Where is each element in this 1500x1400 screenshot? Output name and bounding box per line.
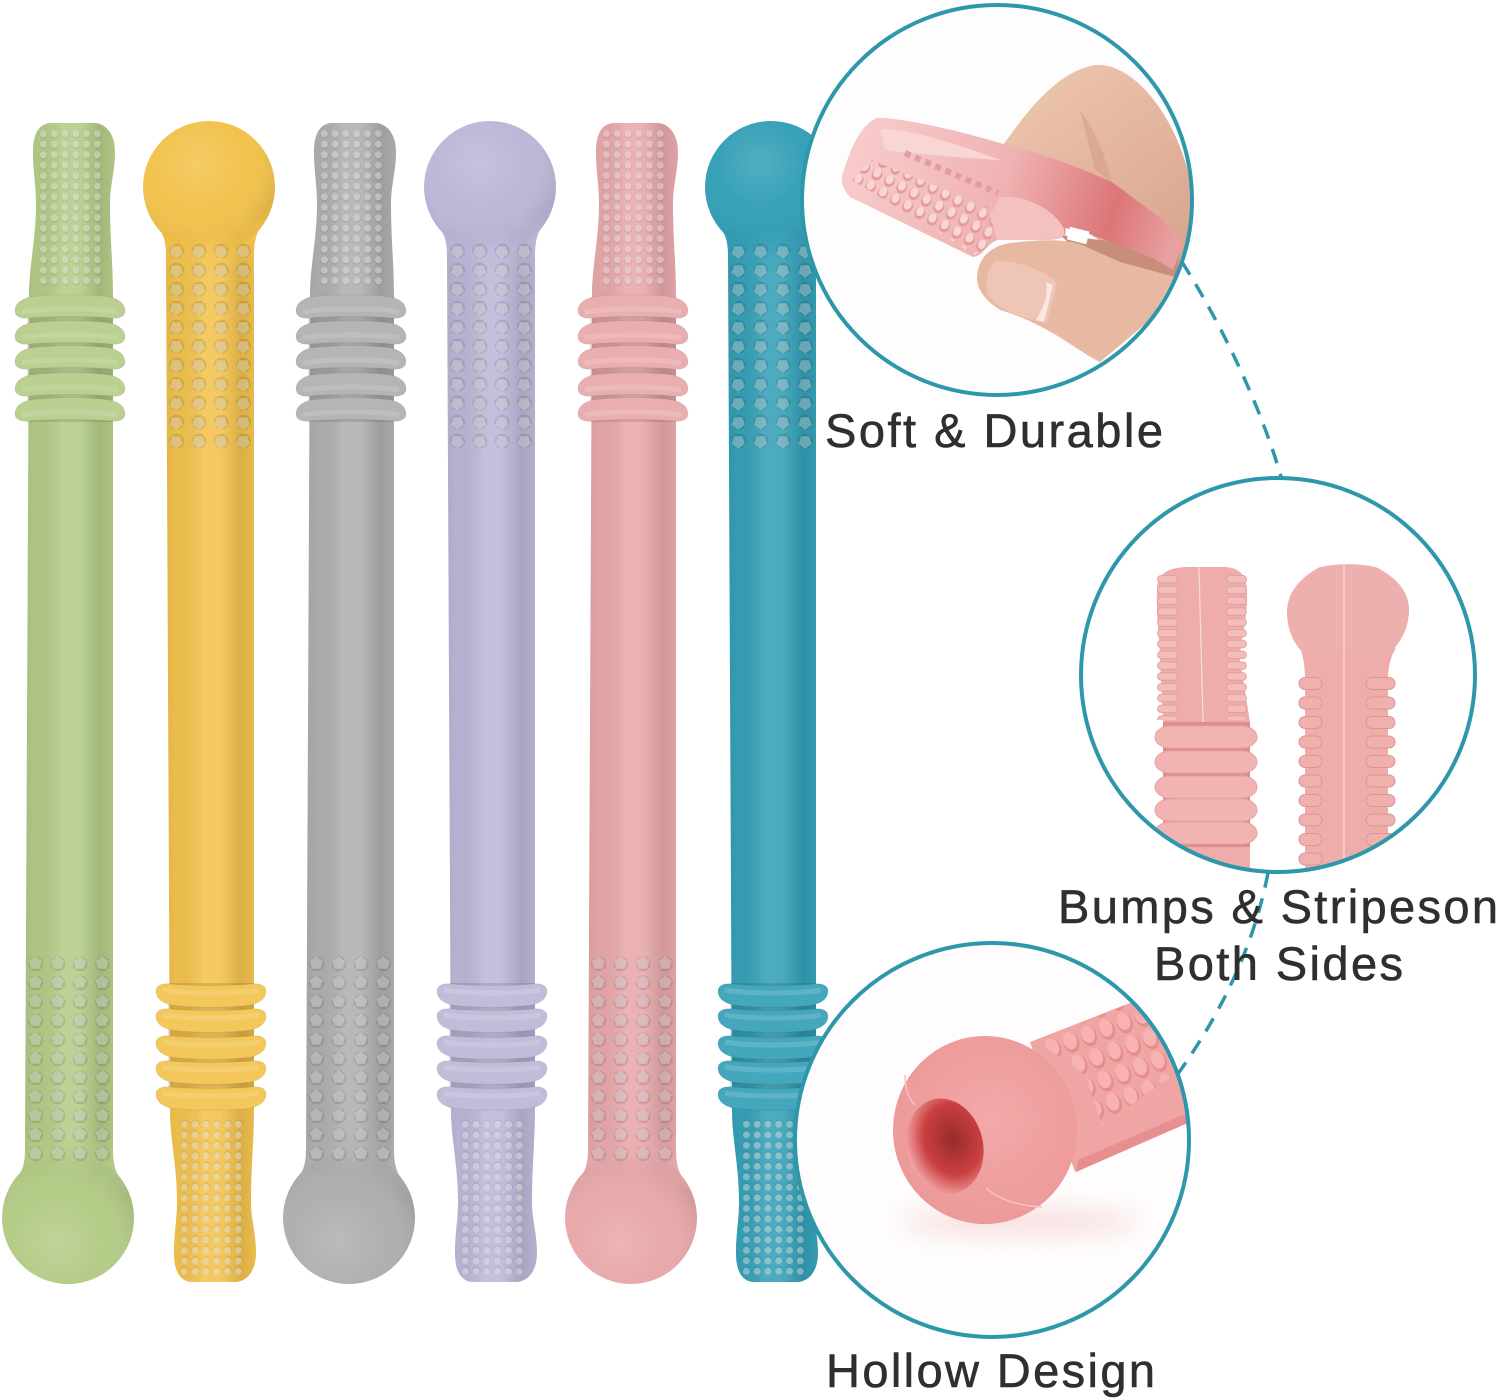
label: hollow design: Hollow Design [826,1344,1155,1397]
stick: teal [705,121,837,1282]
stick: purple [424,121,556,1282]
photo: hollow ball end of teether [893,990,1200,1234]
label: bumps and stripes: Bumps & Stripeson [1058,880,1498,933]
panel: soft and durable circle [802,5,1198,395]
photo: hand squeezing teether [842,65,1198,362]
photo: two teether ends [1155,563,1409,880]
label: soft and durable: Soft & Durable [825,404,1163,457]
stick: grey [283,123,415,1284]
stick: green [2,123,134,1284]
dashed connector lines [1172,262,1282,1082]
stick: yellow [143,121,275,1282]
stick: pink [565,123,697,1284]
label: both sides: Both Sides [1154,937,1403,990]
panel: bumps and stripes circle [1081,478,1475,880]
panel: hollow design circle [795,943,1200,1337]
